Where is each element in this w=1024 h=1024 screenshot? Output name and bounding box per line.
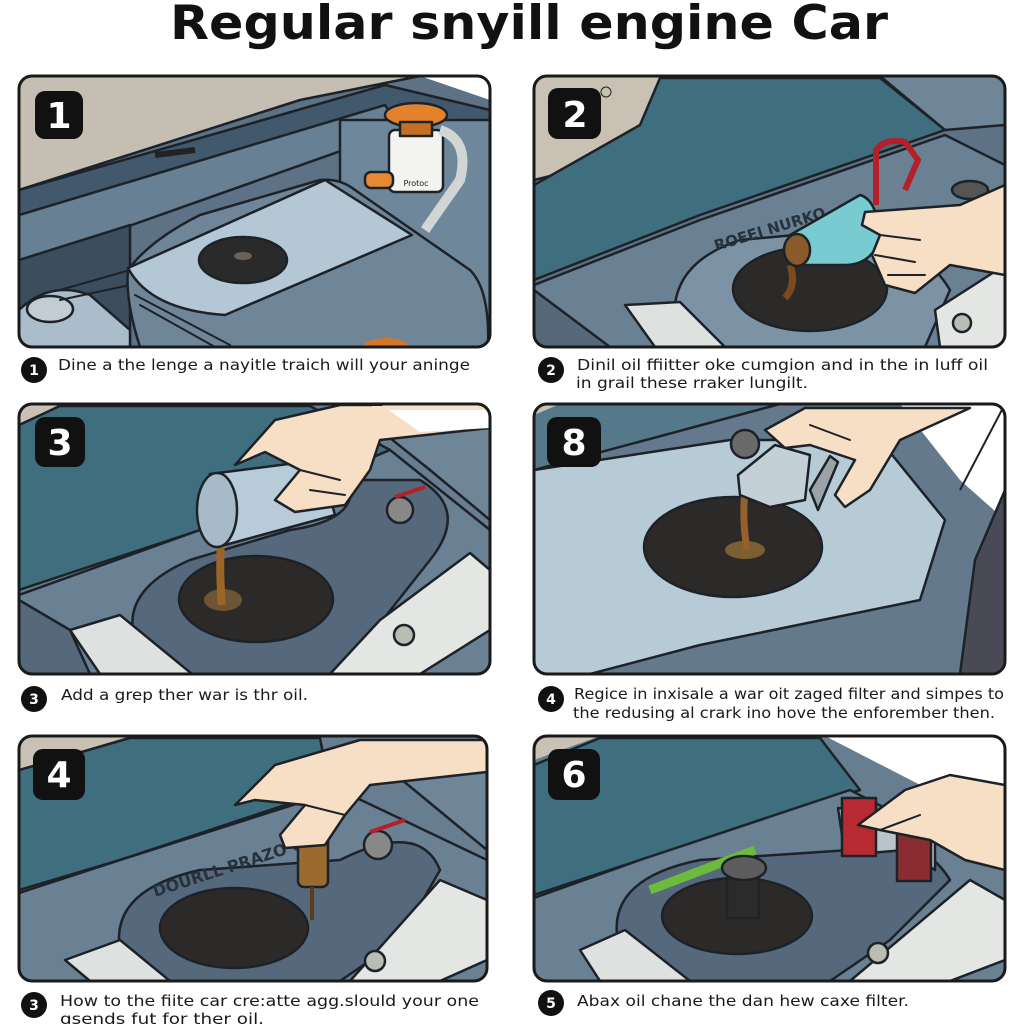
caption 4: Regice in inxisale a war oit zaged filter and simpes to [574, 685, 1004, 703]
panel: step 4 [534, 404, 1005, 674]
icon: filter [722, 856, 766, 918]
icon: cap bottle: Protoc [403, 179, 429, 188]
step badge 2: 2 [562, 95, 588, 136]
step badge 3 [35, 417, 85, 467]
caption 6: 5 [546, 996, 556, 1012]
caption 5: How to the fiite car cre:atte agg.slould your one [60, 992, 479, 1010]
icon: hand [235, 740, 487, 848]
icon: hand [235, 404, 490, 512]
caption 4: 4 [546, 692, 556, 708]
step badge 3: 3 [47, 423, 73, 464]
caption 3 [21, 686, 308, 712]
caption 4 [538, 685, 1004, 722]
panel: step 1 [19, 76, 490, 354]
caption 5 [21, 992, 479, 1024]
step badge 6 [548, 749, 600, 800]
caption 2: 2 [546, 363, 556, 379]
icon: hand [858, 775, 1005, 870]
icon: pouring can [197, 460, 335, 547]
caption 6 [538, 990, 909, 1016]
step badge 8 [547, 417, 601, 467]
panel: step 5 [19, 736, 487, 981]
caption 5: 3 [29, 998, 39, 1014]
caption 6: Abax oil chane the dan hew caxe filter. [577, 992, 909, 1010]
caption 1: Dine a the lenge a nayitle traich will your aninge [58, 356, 470, 374]
step badge 1: 1 [46, 96, 72, 137]
icon: hand [862, 185, 1005, 293]
step badge 8: 8 [561, 423, 587, 464]
icon: hand [765, 408, 970, 507]
caption 3: 3 [29, 692, 39, 708]
panel: step 6 [534, 736, 1005, 981]
caption 4: the redusing al crark ino hove the enforember then. [573, 704, 995, 722]
caption 2: in grail these rraker lungilt. [576, 374, 808, 392]
icon: red tool [838, 798, 935, 881]
panel: step 5: DOURLL PRAZO OIL [150, 829, 323, 901]
caption 2 [538, 356, 988, 392]
panel: step 2 [534, 76, 1005, 347]
icon: oil container [784, 195, 880, 266]
step badge 2 [548, 87, 611, 139]
caption 3: Add a grep ther war is thr oil. [61, 686, 308, 704]
caption 1 [21, 356, 470, 383]
panel: step 2: ROEEI NURKO [712, 204, 828, 255]
icon: cap bottle [365, 103, 447, 192]
icon: oil filter [731, 430, 838, 510]
panel: step 3 [19, 404, 490, 674]
step badge 6: 6 [561, 755, 587, 796]
step badge 1 [35, 91, 83, 139]
icon: green tool [650, 850, 755, 890]
step badge 4 [33, 749, 85, 800]
caption 2: Dinil oil ffiitter oke cumgion and in the in luff oil [577, 356, 988, 374]
caption 1: 1 [29, 363, 39, 379]
step badge 4: 4 [46, 755, 72, 796]
icon: bottle [298, 825, 328, 920]
